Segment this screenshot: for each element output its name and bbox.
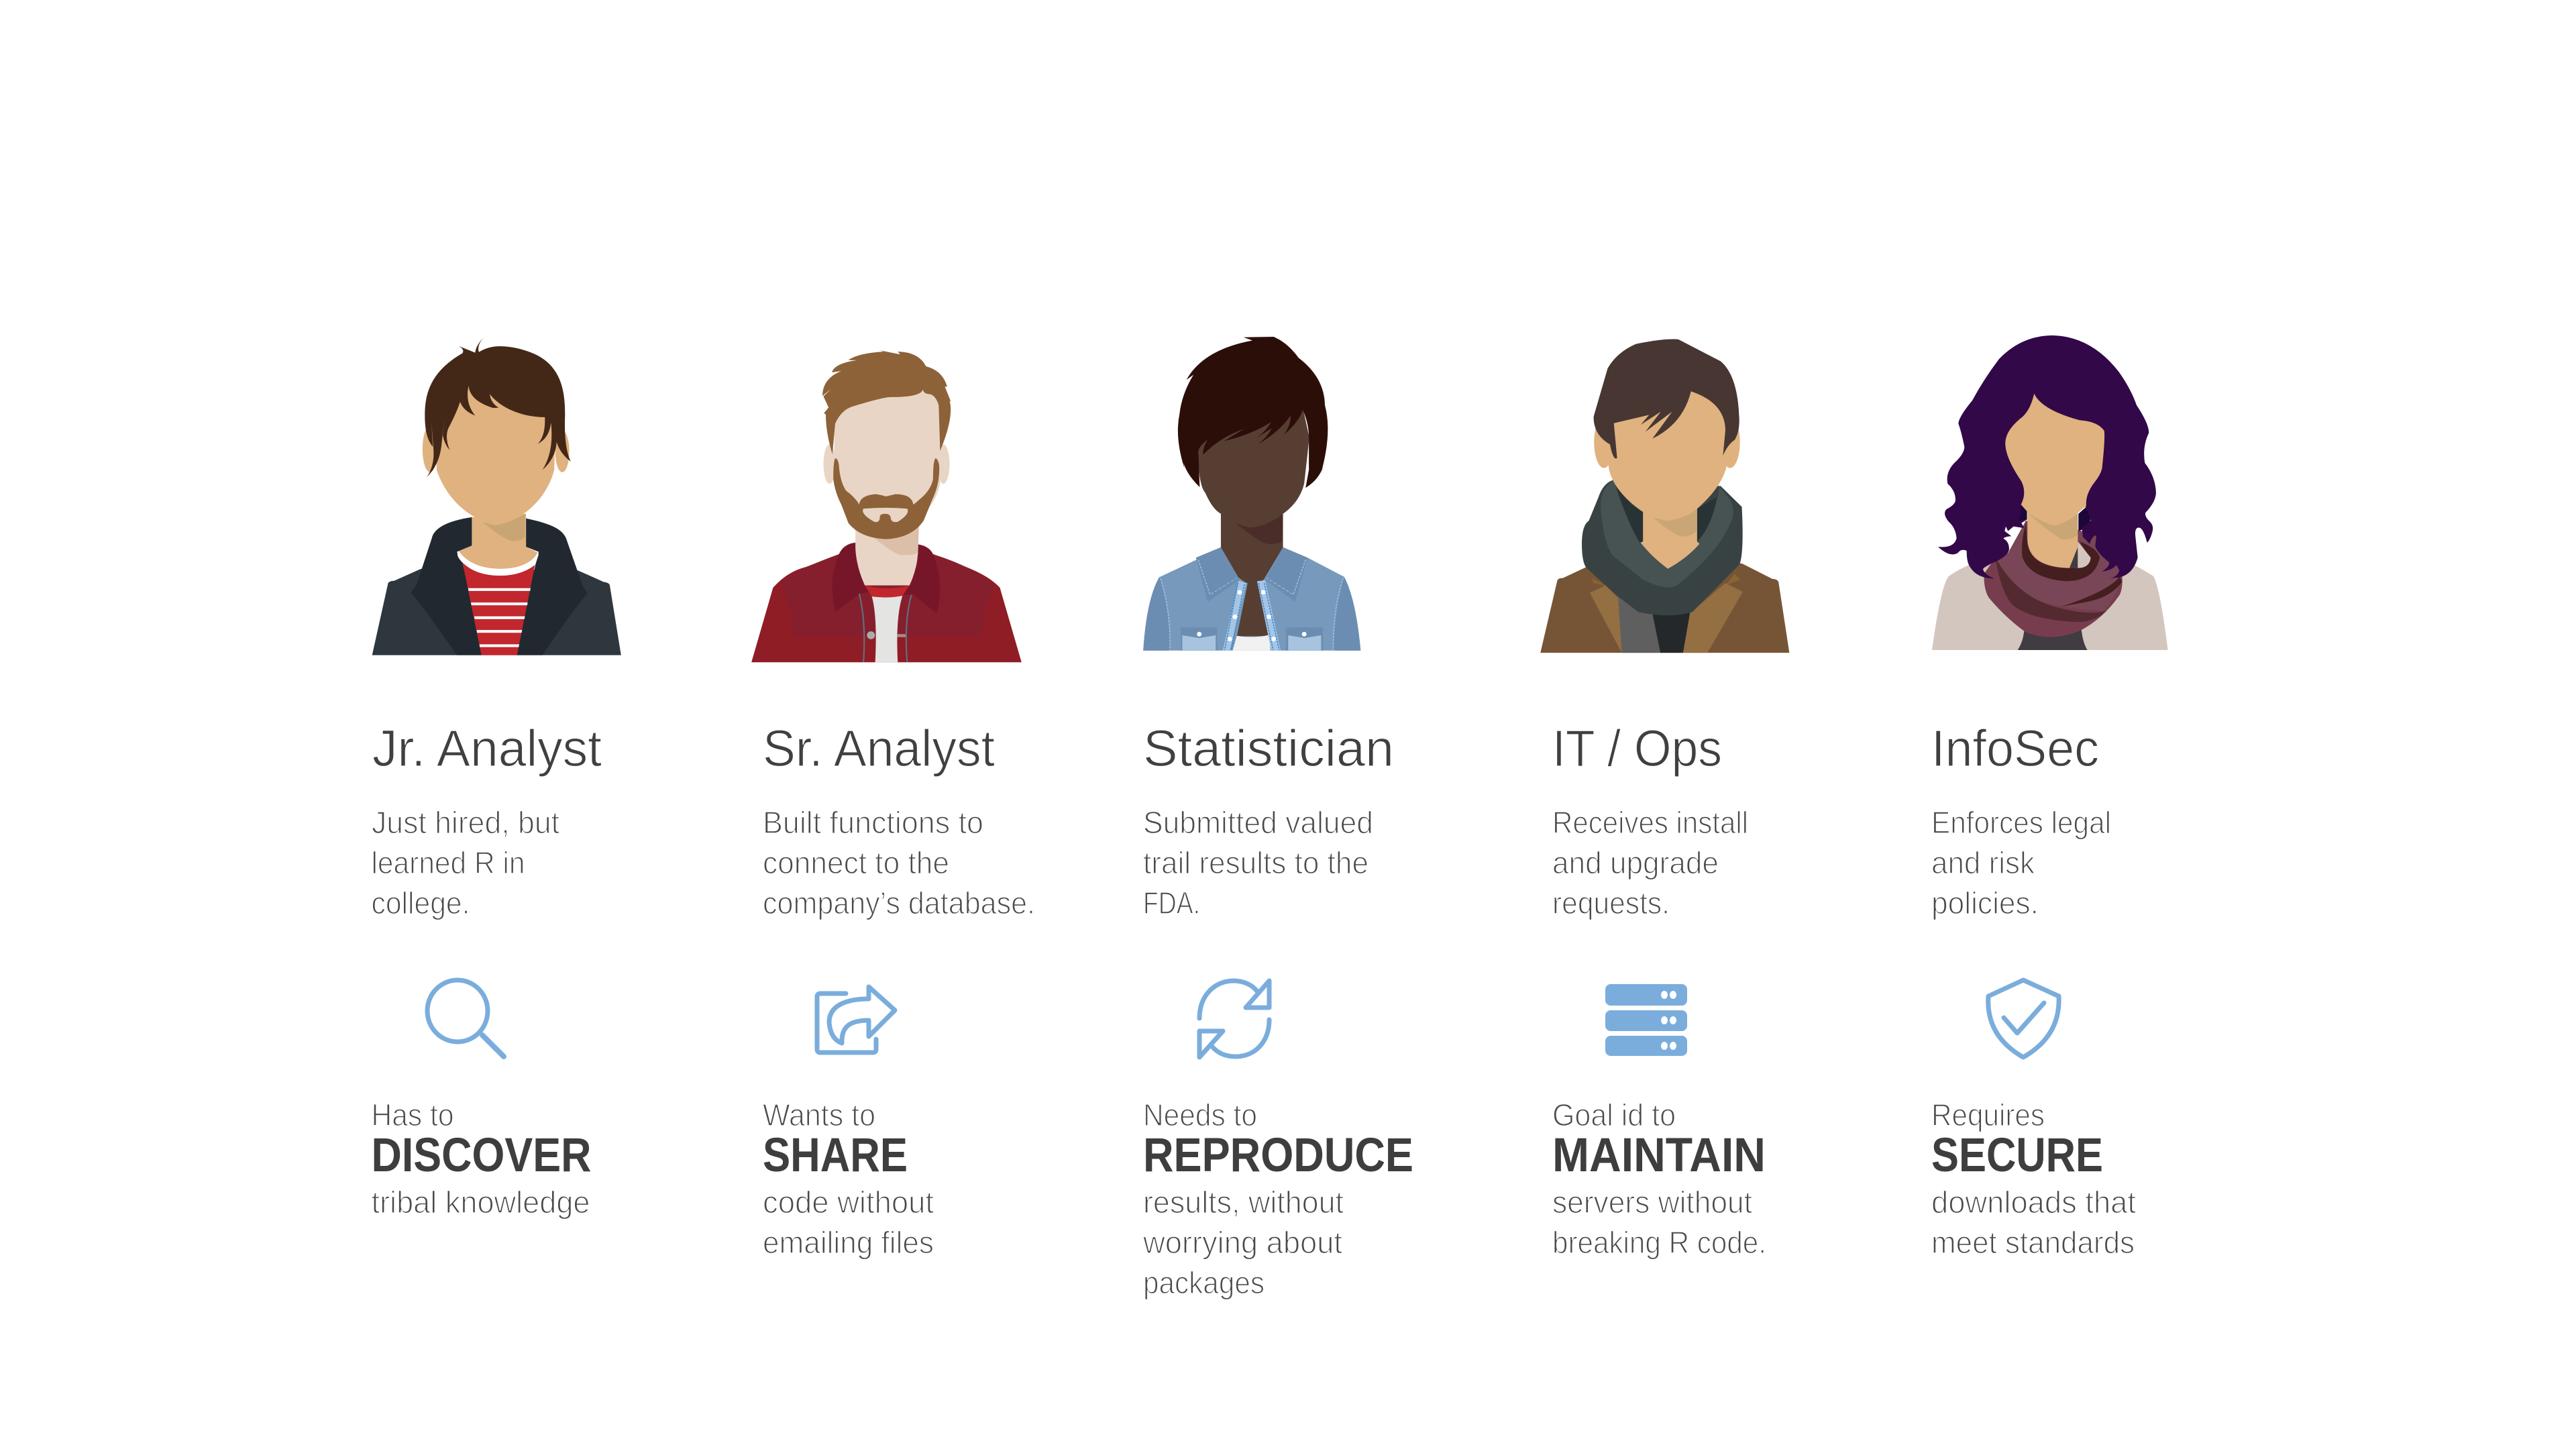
description: Statistician: FDA. [1143, 885, 1200, 920]
icon: magnifier [427, 980, 504, 1057]
need: share [763, 1097, 934, 1260]
description: IT / Ops: Receives install [1552, 805, 1748, 840]
need: share: Wants to [763, 1097, 875, 1132]
avatar: Sr. Analyst [751, 350, 1022, 662]
description: Statistician: trail results to the [1143, 845, 1368, 880]
description: Statistician: Submitted valued [1143, 805, 1373, 840]
column: IT / Ops [1540, 339, 1789, 1260]
need: maintain [1552, 1097, 1766, 1260]
heading: Jr. Analyst: Jr. Analyst [372, 720, 602, 777]
column: Jr. Analyst [372, 337, 621, 1220]
description: InfoSec: policies. [1931, 885, 2039, 920]
avatar: IT / Ops [1540, 339, 1789, 653]
description: InfoSec: Enforces legal [1931, 805, 2111, 840]
need: reproduce: worrying about [1142, 1225, 1342, 1260]
icon: shield [1988, 980, 2059, 1057]
avatar: Jr. Analyst [372, 337, 621, 655]
avatar: InfoSec [1932, 335, 2168, 650]
need: share: emailing files [763, 1225, 934, 1260]
icon: share [817, 987, 895, 1053]
need: share: code without [763, 1185, 934, 1220]
icon: refresh [1199, 981, 1269, 1057]
need: discover: DISCOVER [372, 1129, 592, 1182]
need: secure: Requires [1931, 1097, 2045, 1132]
description: Jr. Analyst: learned R in [372, 845, 525, 880]
description: Sr. Analyst: company’s database. [763, 885, 1035, 920]
description: IT / Ops: and upgrade [1552, 845, 1719, 880]
heading: IT / Ops: IT / Ops [1552, 720, 1722, 777]
description: Sr. Analyst: Built functions to [763, 805, 983, 840]
need: secure: SECURE [1931, 1129, 2103, 1182]
description: Sr. Analyst: connect to the [763, 845, 949, 880]
description: InfoSec: and risk [1931, 845, 2035, 880]
heading: Sr. Analyst: Sr. Analyst [763, 720, 995, 777]
need: discover [372, 1097, 592, 1220]
avatar: Statistician [1143, 337, 1360, 651]
need: discover: tribal knowledge [372, 1185, 590, 1220]
need: maintain: servers without [1552, 1185, 1752, 1220]
column: Statistician [1142, 337, 1413, 1300]
need: reproduce [1142, 1097, 1413, 1300]
column: Sr. Analyst [751, 350, 1035, 1260]
need: reproduce: REPRODUCE [1143, 1129, 1413, 1182]
icon: server [1605, 984, 1687, 1056]
description: Jr. Analyst [372, 805, 559, 920]
need: secure: downloads that [1931, 1185, 2136, 1220]
description: Sr. Analyst [763, 805, 1035, 920]
description: Statistician [1143, 805, 1373, 920]
description: IT / Ops: requests. [1552, 885, 1670, 920]
description: IT / Ops [1552, 805, 1748, 920]
heading: InfoSec: InfoSec [1931, 720, 2099, 777]
need: secure [1931, 1097, 2136, 1260]
need: reproduce: packages [1143, 1265, 1265, 1300]
need: maintain: Goal id to [1552, 1097, 1676, 1132]
need: maintain: breaking R code. [1552, 1225, 1766, 1260]
description: Jr. Analyst: Just hired, but [372, 805, 559, 840]
need: maintain: MAINTAIN [1552, 1129, 1766, 1182]
need: reproduce: Needs to [1143, 1097, 1257, 1132]
description: InfoSec [1931, 805, 2111, 920]
need: reproduce: results, without [1143, 1185, 1344, 1220]
need: share: SHARE [763, 1129, 908, 1182]
column: InfoSec [1931, 335, 2168, 1260]
need: secure: meet standards [1931, 1225, 2135, 1260]
heading: Statistician: Statistician [1143, 720, 1394, 777]
description: Jr. Analyst: college. [372, 885, 470, 920]
need: discover: Has to [372, 1097, 453, 1132]
